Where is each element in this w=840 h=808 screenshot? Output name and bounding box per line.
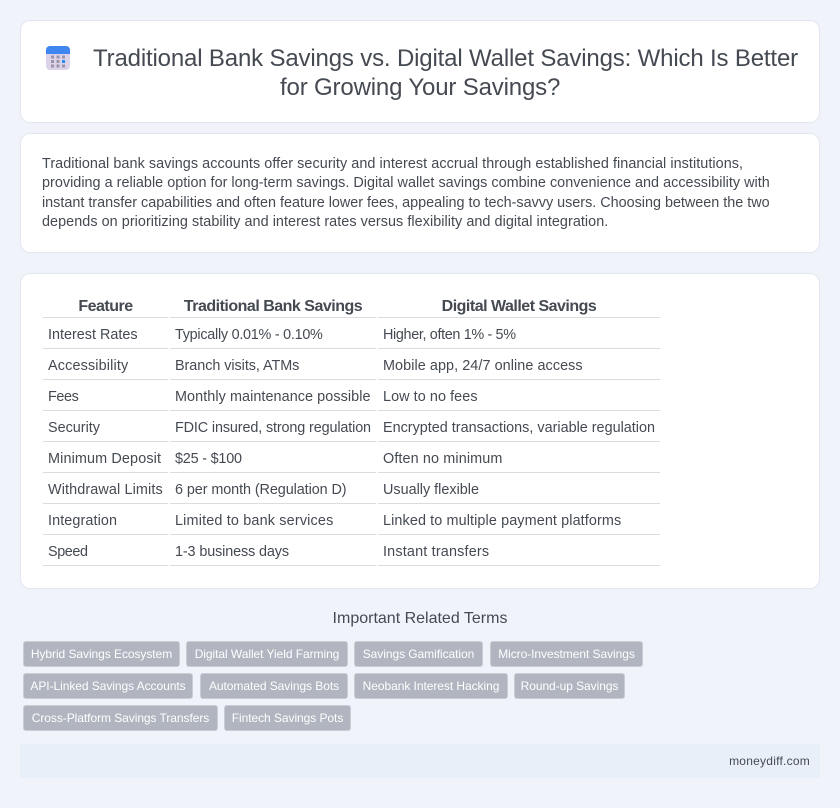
tag: Digital Wallet Yield Farming bbox=[195, 647, 339, 661]
row: interest rates: Interest Rates bbox=[48, 327, 138, 343]
panel: comparison table: Usually flexible bbox=[383, 482, 479, 498]
tag bbox=[186, 641, 348, 667]
tag bbox=[200, 673, 348, 699]
panel: comparison table: $25 - $100 bbox=[175, 451, 242, 467]
panel: comparison table: Instant transfers bbox=[383, 544, 489, 560]
row: fees: Fees bbox=[48, 389, 78, 405]
tag: Fintech Savings Pots bbox=[232, 711, 343, 725]
icon: calendar bbox=[46, 46, 70, 70]
tag: Micro-Investment Savings bbox=[498, 647, 635, 661]
footer text: source: moneydiff.com bbox=[729, 754, 810, 768]
tag bbox=[23, 673, 193, 699]
panel: comparison table: Typically 0.01% - 0.10% bbox=[175, 327, 323, 343]
table header: feature: Feature bbox=[78, 298, 133, 315]
title: for Growing Your Savings? bbox=[280, 74, 560, 101]
row: accessibility: Accessibility bbox=[48, 358, 128, 374]
row: security: Security bbox=[48, 420, 100, 436]
panel: comparison table: Low to no fees bbox=[383, 389, 478, 405]
tag: Cross-Platform Savings Transfers bbox=[32, 711, 209, 725]
summary text bbox=[42, 156, 770, 230]
tag: Neobank Interest Hacking bbox=[363, 679, 499, 693]
title: Traditional Bank Savings vs. Digital Wallet Savings: Which Is Better bbox=[93, 45, 798, 72]
panel: comparison table: Encrypted transactions, variable regulation bbox=[383, 420, 655, 436]
tag bbox=[23, 641, 180, 667]
panel: header bbox=[20, 20, 820, 123]
table header: traditional: Traditional Bank Savings bbox=[184, 298, 362, 315]
tag: Round-up Savings bbox=[521, 679, 618, 693]
summary text: Traditional bank savings accounts offer security and interest accrual through established financial institutions, bbox=[42, 156, 743, 172]
row: withdrawal limits: Withdrawal Limits bbox=[48, 482, 163, 498]
row: integration: Integration bbox=[48, 513, 117, 529]
tag bbox=[514, 673, 625, 699]
panel: comparison table: Monthly maintenance possible bbox=[175, 389, 371, 405]
panel: summary bbox=[20, 133, 820, 253]
panel: comparison table: 6 per month (Regulation D) bbox=[175, 482, 346, 498]
tag group: related terms bbox=[23, 641, 643, 731]
panel: comparison table bbox=[20, 273, 820, 589]
row: speed: Speed bbox=[48, 544, 88, 560]
tag bbox=[354, 641, 483, 667]
summary text: instant transfer capabilities and often feature lower fees, appealing to tech-savvy users. Choosing between the two bbox=[42, 195, 770, 211]
summary text: providing a reliable option for long-term savings. Digital wallet savings combine convenience and accessibility with bbox=[42, 175, 770, 191]
panel: comparison table: Mobile app, 24/7 online access bbox=[383, 358, 583, 374]
tag bbox=[354, 673, 508, 699]
tag: Hybrid Savings Ecosystem bbox=[31, 647, 172, 661]
panel: comparison table: Branch visits, ATMs bbox=[175, 358, 299, 374]
tag bbox=[224, 705, 351, 731]
summary text: depends on prioritizing stability and interest rates versus flexibility and digital integration. bbox=[42, 214, 608, 230]
panel: comparison table: Limited to bank services bbox=[175, 513, 333, 529]
panel: comparison table: 1-3 business days bbox=[175, 544, 289, 560]
panel: comparison table: Linked to multiple payment platforms bbox=[383, 513, 621, 529]
table header: digital: Digital Wallet Savings bbox=[442, 298, 596, 315]
footer bar bbox=[20, 744, 820, 778]
title bbox=[93, 45, 798, 101]
panel: comparison table: Often no minimum bbox=[383, 451, 502, 467]
tag: Savings Gamification bbox=[363, 647, 474, 661]
tag bbox=[490, 641, 643, 667]
panel: comparison table: FDIC insured, strong regulation bbox=[175, 420, 371, 436]
tag: Automated Savings Bots bbox=[209, 679, 339, 693]
heading: related terms: Important Related Terms bbox=[333, 610, 507, 627]
row: minimum deposit: Minimum Deposit bbox=[48, 451, 161, 467]
tag: API-Linked Savings Accounts bbox=[30, 679, 186, 693]
tag bbox=[23, 705, 218, 731]
panel: comparison table: Higher, often 1% - 5% bbox=[383, 327, 516, 343]
